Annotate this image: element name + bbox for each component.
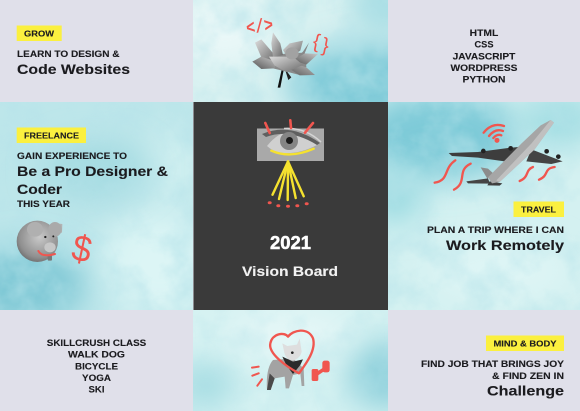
text: skillcrush class: SKILLCRUSH CLASS — [47, 338, 147, 349]
badge: freelance — [17, 128, 86, 143]
text: css: CSS — [474, 40, 494, 51]
marble background — [388, 102, 580, 310]
heading: be a pro designer: Be a Pro Designer & — [17, 163, 168, 179]
icon: lotus flower — [252, 32, 318, 88]
text: learn to design: LEARN TO DESIGN & — [17, 49, 120, 60]
dark background — [194, 102, 388, 310]
marble background — [193, 0, 388, 102]
icon: code brackets: } — [320, 34, 331, 57]
heading: vision board: Vision Board — [242, 263, 338, 279]
badge: freelance: FREELANCE — [24, 130, 79, 140]
text: bicycle: BICYCLE — [75, 361, 119, 372]
panel: skills list — [450, 28, 518, 86]
icon: airplane — [449, 120, 563, 186]
icon: code brackets — [246, 18, 328, 56]
heading: 2021: 2021 — [270, 233, 311, 253]
marble background — [0, 102, 193, 310]
heading: challenge: Challenge — [487, 382, 564, 398]
icon: red lash strokes — [265, 120, 313, 133]
badge: mind and body: MIND & BODY — [494, 338, 557, 348]
icon: dollar sign: $ — [68, 227, 95, 271]
text: python: PYTHON — [462, 75, 506, 86]
panel: mind and body — [421, 336, 565, 398]
text: this year: THIS YEAR — [17, 199, 70, 210]
icon: dumbbell — [312, 361, 330, 381]
text: wordpress: WORDPRESS — [450, 63, 518, 74]
icon: heart outline — [270, 331, 314, 373]
badge: travel: TRAVEL — [521, 204, 556, 214]
panel: lotus marble — [193, 0, 388, 102]
icon: motion lines — [252, 367, 262, 386]
icon: code brackets: </> — [245, 14, 275, 40]
panel: dog marble — [193, 310, 388, 411]
panel: freelance — [0, 102, 193, 310]
heading: work remotely: Work Remotely — [446, 237, 564, 253]
text: gain experience: GAIN EXPERIENCE TO — [17, 151, 128, 162]
panel: activities list — [47, 338, 147, 396]
icon: dog — [267, 339, 304, 390]
text: yoga: YOGA — [82, 373, 111, 384]
text: walk dog: WALK DOG — [68, 350, 125, 361]
text: find job: FIND JOB THAT BRINGS JOY — [421, 359, 565, 370]
icon: piggy bank — [17, 221, 62, 262]
badge: mind and body — [486, 336, 564, 351]
text: find zen: & FIND ZEN IN — [492, 371, 564, 382]
heading: coder: Coder — [17, 181, 63, 197]
icon: code brackets: { — [311, 30, 322, 53]
heading: code websites: Code Websites — [17, 61, 130, 77]
badge: travel — [514, 202, 564, 217]
badge: grow: GROW — [24, 28, 54, 38]
icon: red dots — [268, 201, 309, 208]
text: ski: SKI — [88, 385, 105, 396]
panel: travel — [388, 102, 580, 310]
icon: eye photo — [257, 128, 324, 161]
icon: wifi and motion lines — [435, 125, 555, 190]
panel: grow — [17, 26, 130, 77]
icon: yellow rays — [271, 149, 314, 200]
text: javascript: JAVASCRIPT — [453, 51, 515, 62]
marble background — [193, 310, 388, 411]
text: plan a trip: PLAN A TRIP WHERE I CAN — [427, 225, 564, 236]
panel: centre vision board — [194, 102, 388, 310]
text: html: HTML — [470, 28, 499, 39]
